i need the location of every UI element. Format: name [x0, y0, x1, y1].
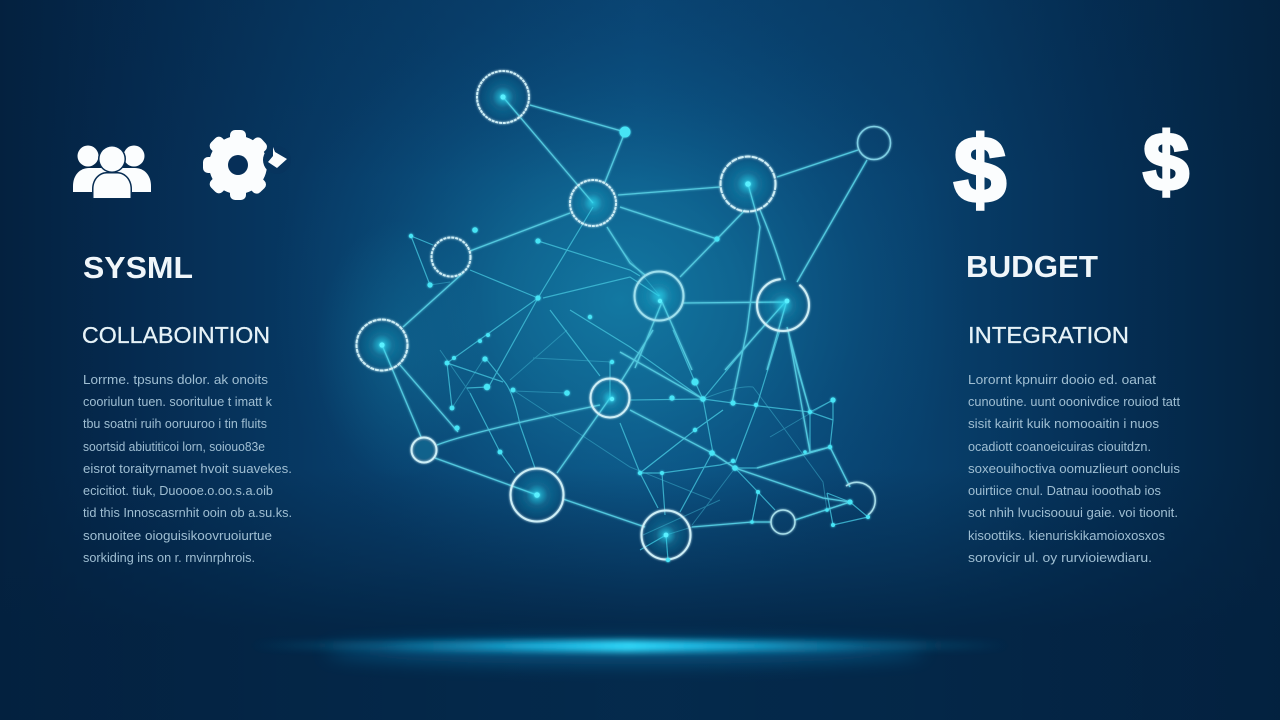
text block: left body copy: eisrot toraityrnamet hvoit suavekes. [83, 462, 292, 476]
node: upper left ring [432, 238, 470, 276]
node: top hub [477, 71, 529, 123]
text block: right body copy: ocadiott coanoeicuiras ciouitdzn. [968, 440, 1151, 454]
text block: right body copy: cunoutine. uunt ooonivdice rouiod tatt [968, 395, 1181, 409]
panel: left SysML collaboration [73, 130, 292, 565]
text block: left body copy: sonuoitee oioguisikoovruoiurtue [83, 529, 272, 543]
text block: right body copy: soxeouihoctiva oomuzlieurt ooncluis [968, 462, 1180, 476]
icon: dollar sign left: $ [954, 117, 1006, 222]
text block: right body copy: sorovicir ul. oy rurvioiewdiaru. [968, 551, 1152, 565]
text block: right body copy: sisit kairit kuik nomooaitin i nuos [968, 417, 1159, 431]
heading: SYSML: SYSML [83, 250, 193, 285]
network diagram [356, 71, 890, 562]
floor light glow [250, 640, 1010, 664]
heading: BUDGET: BUDGET [966, 249, 1098, 284]
node: mid ring [590, 378, 630, 418]
node: center hub [634, 272, 684, 320]
text block: left body copy: cooriulun tuen. sooritulue t imatt k [83, 395, 273, 409]
icon: people group [73, 145, 151, 199]
node: bottom hub [642, 510, 690, 560]
heading: INTEGRATION: INTEGRATION [968, 322, 1129, 348]
text block: right body copy: ouirtiice cnul. Datnau iooothab ios [968, 484, 1161, 498]
text block: right body copy: sot nhih lvucisoouui gaie. voi tioonit. [968, 506, 1178, 520]
node: right hub [757, 279, 809, 331]
text block: left body copy: tbu soatni ruih ooruuroo i tin fluits [83, 417, 267, 431]
text block: left body copy: sorkiding ins on r. rnvinrphrois. [83, 551, 255, 565]
text block: right body copy [968, 373, 1181, 565]
node: lower right arc [846, 482, 875, 515]
node: upper center hub [570, 180, 616, 226]
connection lines: faint [430, 248, 833, 535]
connection lines: bright [382, 97, 867, 527]
hub nodes [356, 71, 890, 560]
text block: left body copy: ecicitiot. tiuk, Duoooe.o.oo.s.a.oib [83, 484, 273, 498]
text block: right body copy: Lorornt kpnuirr dooio ed. oanat [968, 373, 1157, 387]
text block: left body copy: tid this Innoscasrnhit ooin ob a.su.ks. [83, 506, 292, 520]
text block: right body copy: kisoottiks. kienuriskikamoioxosxos [968, 529, 1165, 543]
node: lower hub [510, 468, 564, 522]
text block: left body copy [83, 373, 292, 565]
heading: COLLABOINTION: COLLABOINTION [82, 322, 270, 348]
glowing junction dots [409, 126, 870, 562]
node: upper right hub [720, 156, 776, 212]
node: left hub [356, 320, 408, 370]
node: small bottom ring [771, 510, 795, 534]
node: small left ring [412, 438, 436, 462]
panel: right budget integration [954, 117, 1189, 565]
icon: gear [203, 130, 291, 200]
icon: dollar sign right: $ [1143, 117, 1189, 208]
text block: left body copy: soortsid abiutiticoi lorn, soiouo83e [83, 440, 265, 454]
connection lines: medium [411, 207, 868, 560]
node: far right ring [858, 126, 890, 160]
text block: left body copy: Lorrme. tpsuns dolor. ak onoits [83, 373, 268, 387]
